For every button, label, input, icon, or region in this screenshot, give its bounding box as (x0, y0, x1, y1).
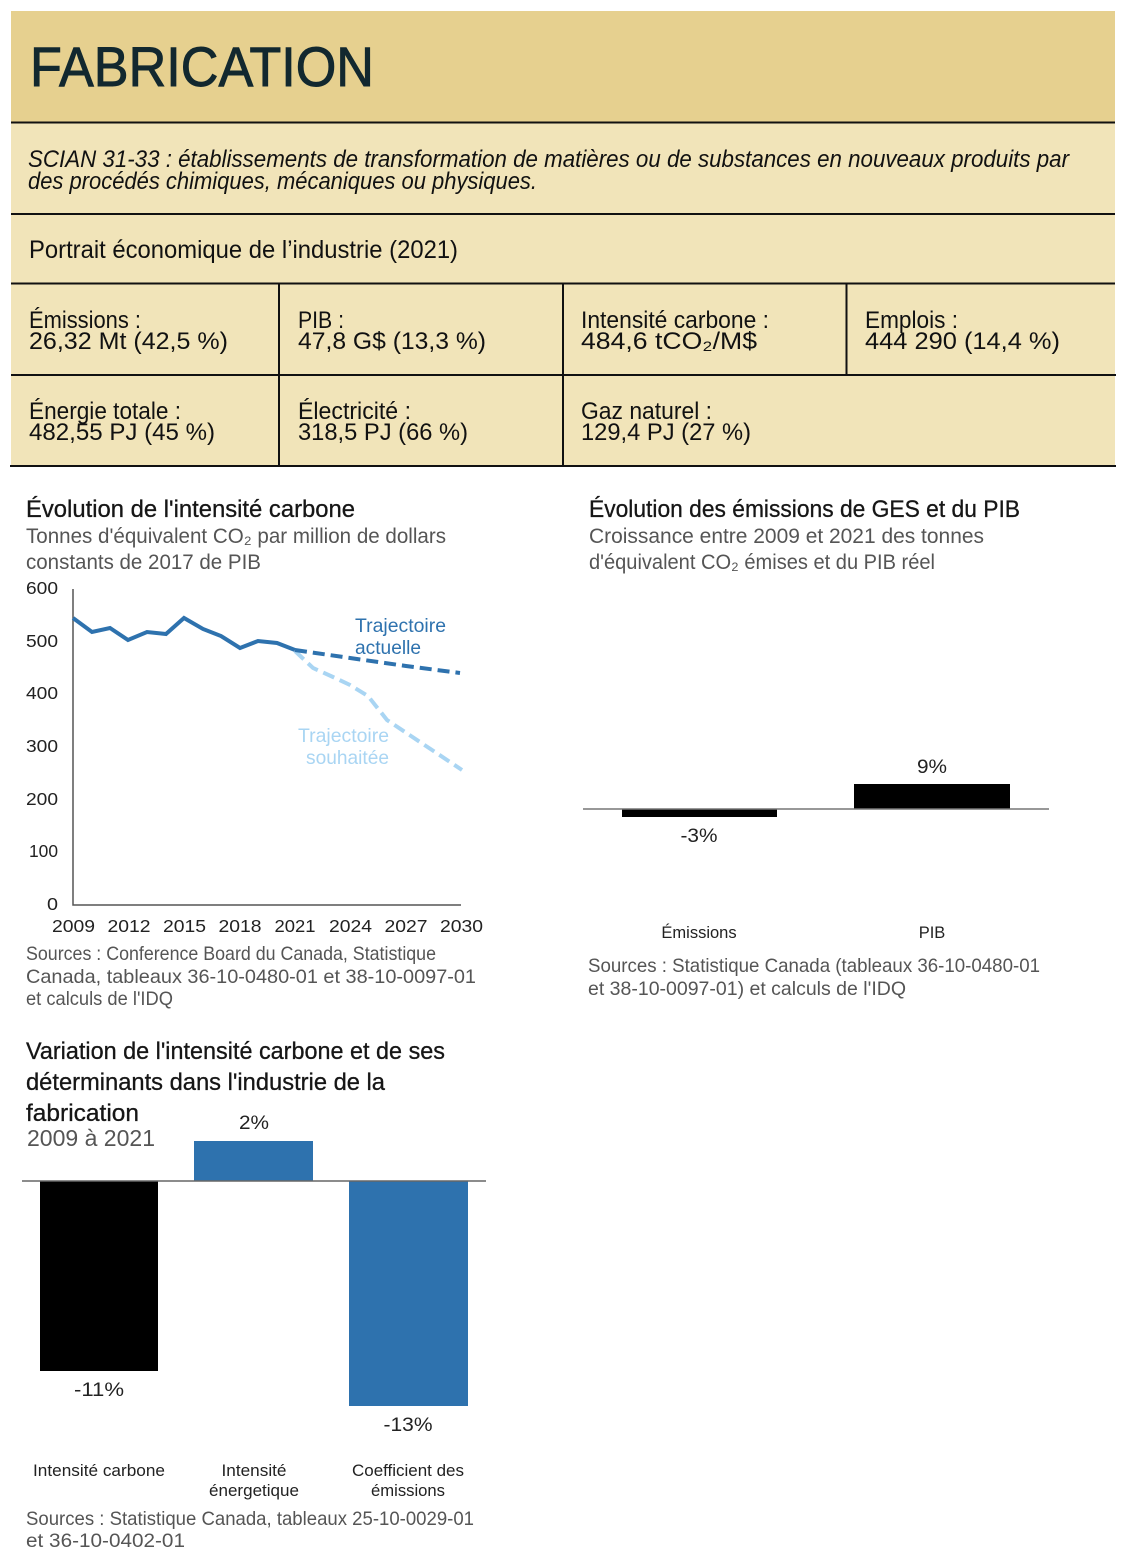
title: FABRICATION (30, 35, 374, 98)
y axis labels (26, 578, 58, 914)
value: -3%: -3% (680, 825, 718, 847)
x axis labels: 2030 (440, 916, 483, 936)
stat: émissions: 26,32 Mt (42,5 %) (29, 328, 228, 355)
stat: électricité: 318,5 PJ (66 %) (298, 419, 468, 446)
stat: électricité (298, 398, 468, 446)
sources: Sources : Statistique Canada, tableaux 25-10-0029-01 (26, 1508, 474, 1530)
label: trajectoire souhaitée: Trajectoire (298, 725, 389, 747)
industry definition (28, 146, 1070, 195)
label: trajectoire actuelle: Trajectoire (355, 615, 446, 637)
industry definition: SCIAN 31-33 : établissements de transformation de matières ou de substances en nouveaux produits par (28, 146, 1070, 173)
bar: PIB (854, 784, 1010, 809)
sources (26, 1508, 474, 1552)
x axis labels: 2012 (108, 916, 150, 936)
sources (588, 955, 1040, 1000)
x axis labels: 2027 (384, 916, 428, 936)
industry definition: des procédés chimiques, mécaniques ou physiques. (28, 168, 537, 195)
y axis labels: 300 (26, 736, 58, 756)
bar: coefficient des émissions (349, 1181, 468, 1406)
stat: emplois: Emplois : (865, 307, 958, 334)
value: 9%: 9% (917, 756, 947, 778)
sources: et calculs de l'IDQ (26, 988, 173, 1010)
sources: Sources : Statistique Canada (tableaux 36-10-0480-01 (588, 955, 1040, 977)
stat: intensité carbone: 484,6 tCO₂/M$ (581, 328, 757, 355)
x axis labels: 2024 (329, 916, 372, 936)
category: intensité énergétique: énergetique (209, 1482, 299, 1500)
chart subtitle (26, 525, 446, 574)
category: PIB: PIB (919, 924, 945, 942)
label: trajectoire actuelle: actuelle (355, 637, 421, 659)
panel: description and economic portrait table (10, 122, 1116, 466)
sources: et 38-10-0097-01) et calculs de l'IDQ (588, 978, 906, 1000)
chart subtitle: constants de 2017 de PIB (26, 551, 261, 574)
y axis labels: 200 (26, 789, 58, 809)
chart heading (26, 1038, 445, 1127)
category: coefficient des émissions: émissions (371, 1482, 445, 1500)
stat: emplois: 444 290 (14,4 %) (865, 328, 1060, 355)
chart subtitle: 2009 à 2021 (27, 1125, 155, 1151)
y axis labels: 0 (47, 894, 58, 914)
historical line (73, 618, 295, 650)
category: coefficient des émissions: Coefficient des (352, 1462, 464, 1480)
line chart (26, 578, 483, 936)
stat: intensité carbone (581, 307, 769, 355)
x axis labels: 2015 (163, 916, 206, 936)
section heading: portrait: Portrait économique de l’industrie (2021) (29, 236, 458, 264)
chart subtitle: Croissance entre 2009 et 2021 des tonnes (589, 525, 984, 548)
stat: émissions: Émissions : (29, 307, 141, 334)
label: trajectoire souhaitée: souhaitée (306, 747, 389, 769)
panel: évolution de l'intensité carbone (26, 496, 483, 1010)
category: intensité énergétique: Intensité (222, 1462, 286, 1480)
bar: émissions (622, 809, 777, 817)
stat: énergie totale (29, 398, 215, 446)
panel: variation de l'intensité carbone (22, 1038, 486, 1552)
y axis labels: 600 (26, 578, 58, 598)
stat: PIB: PIB : (298, 307, 344, 334)
chart subtitle (589, 525, 984, 574)
chart heading: Évolution de l'intensité carbone (26, 496, 355, 523)
chart heading: Variation de l'intensité carbone et de ses (26, 1038, 445, 1065)
bar: intensité carbone (40, 1181, 158, 1371)
x axis labels: 2021 (274, 916, 316, 936)
stat: gaz naturel (581, 398, 751, 446)
value: 2%: 2% (239, 1112, 269, 1134)
sources: Canada, tableaux 36-10-0480-01 et 38-10-0097-01 (26, 966, 476, 988)
y axis labels: 400 (26, 683, 58, 703)
stat: énergie totale: 482,55 PJ (45 %) (29, 419, 215, 446)
chart heading: Évolution des émissions de GES et du PIB (589, 496, 1020, 523)
x axis labels: 2009 (52, 916, 95, 936)
category: intensité carbone: Intensité carbone (33, 1462, 165, 1480)
label: trajectoire souhaitée (298, 725, 389, 769)
chart heading: déterminants dans l'industrie de la (26, 1069, 386, 1096)
sources: Sources : Conference Board du Canada, Statistique (26, 943, 436, 965)
category: coefficient des émissions (352, 1462, 464, 1500)
panel: évolution des émissions de GES et du PIB (583, 496, 1049, 1000)
category: intensité énergétique (209, 1462, 299, 1500)
stat: PIB: 47,8 G$ (13,3 %) (298, 328, 486, 355)
stat: énergie totale: Énergie totale : (29, 398, 181, 425)
x axis labels (52, 916, 483, 936)
chart subtitle: Tonnes d'équivalent CO₂ par million de dollars (26, 525, 446, 548)
panel: header band (11, 11, 1115, 122)
bar: intensité énergétique (194, 1141, 313, 1181)
stat: emplois (865, 307, 1060, 355)
y axis labels: 100 (29, 841, 58, 861)
stat: gaz naturel: 129,4 PJ (27 %) (581, 419, 751, 446)
y axis labels: 500 (26, 631, 58, 651)
category: émissions: Émissions (661, 923, 737, 942)
sources (26, 943, 476, 1010)
value: -11%: -11% (74, 1379, 124, 1401)
x axis labels: 2018 (218, 916, 262, 936)
chart subtitle: d'équivalent CO₂ émises et du PIB réel (589, 551, 935, 574)
sources: et 36-10-0402-01 (26, 1530, 185, 1552)
stat: émissions (29, 307, 228, 355)
label: trajectoire actuelle (355, 615, 446, 659)
stat: électricité: Électricité : (298, 398, 411, 425)
stat: PIB (298, 307, 486, 355)
bar chart (583, 756, 1049, 942)
bar chart (22, 1112, 486, 1500)
current trajectory line (295, 650, 460, 673)
stat: gaz naturel: Gaz naturel : (581, 398, 712, 425)
stat: intensité carbone: Intensité carbone : (581, 307, 769, 334)
desired trajectory line (295, 651, 462, 770)
chart heading: fabrication (26, 1100, 139, 1127)
value: -13%: -13% (384, 1414, 432, 1436)
